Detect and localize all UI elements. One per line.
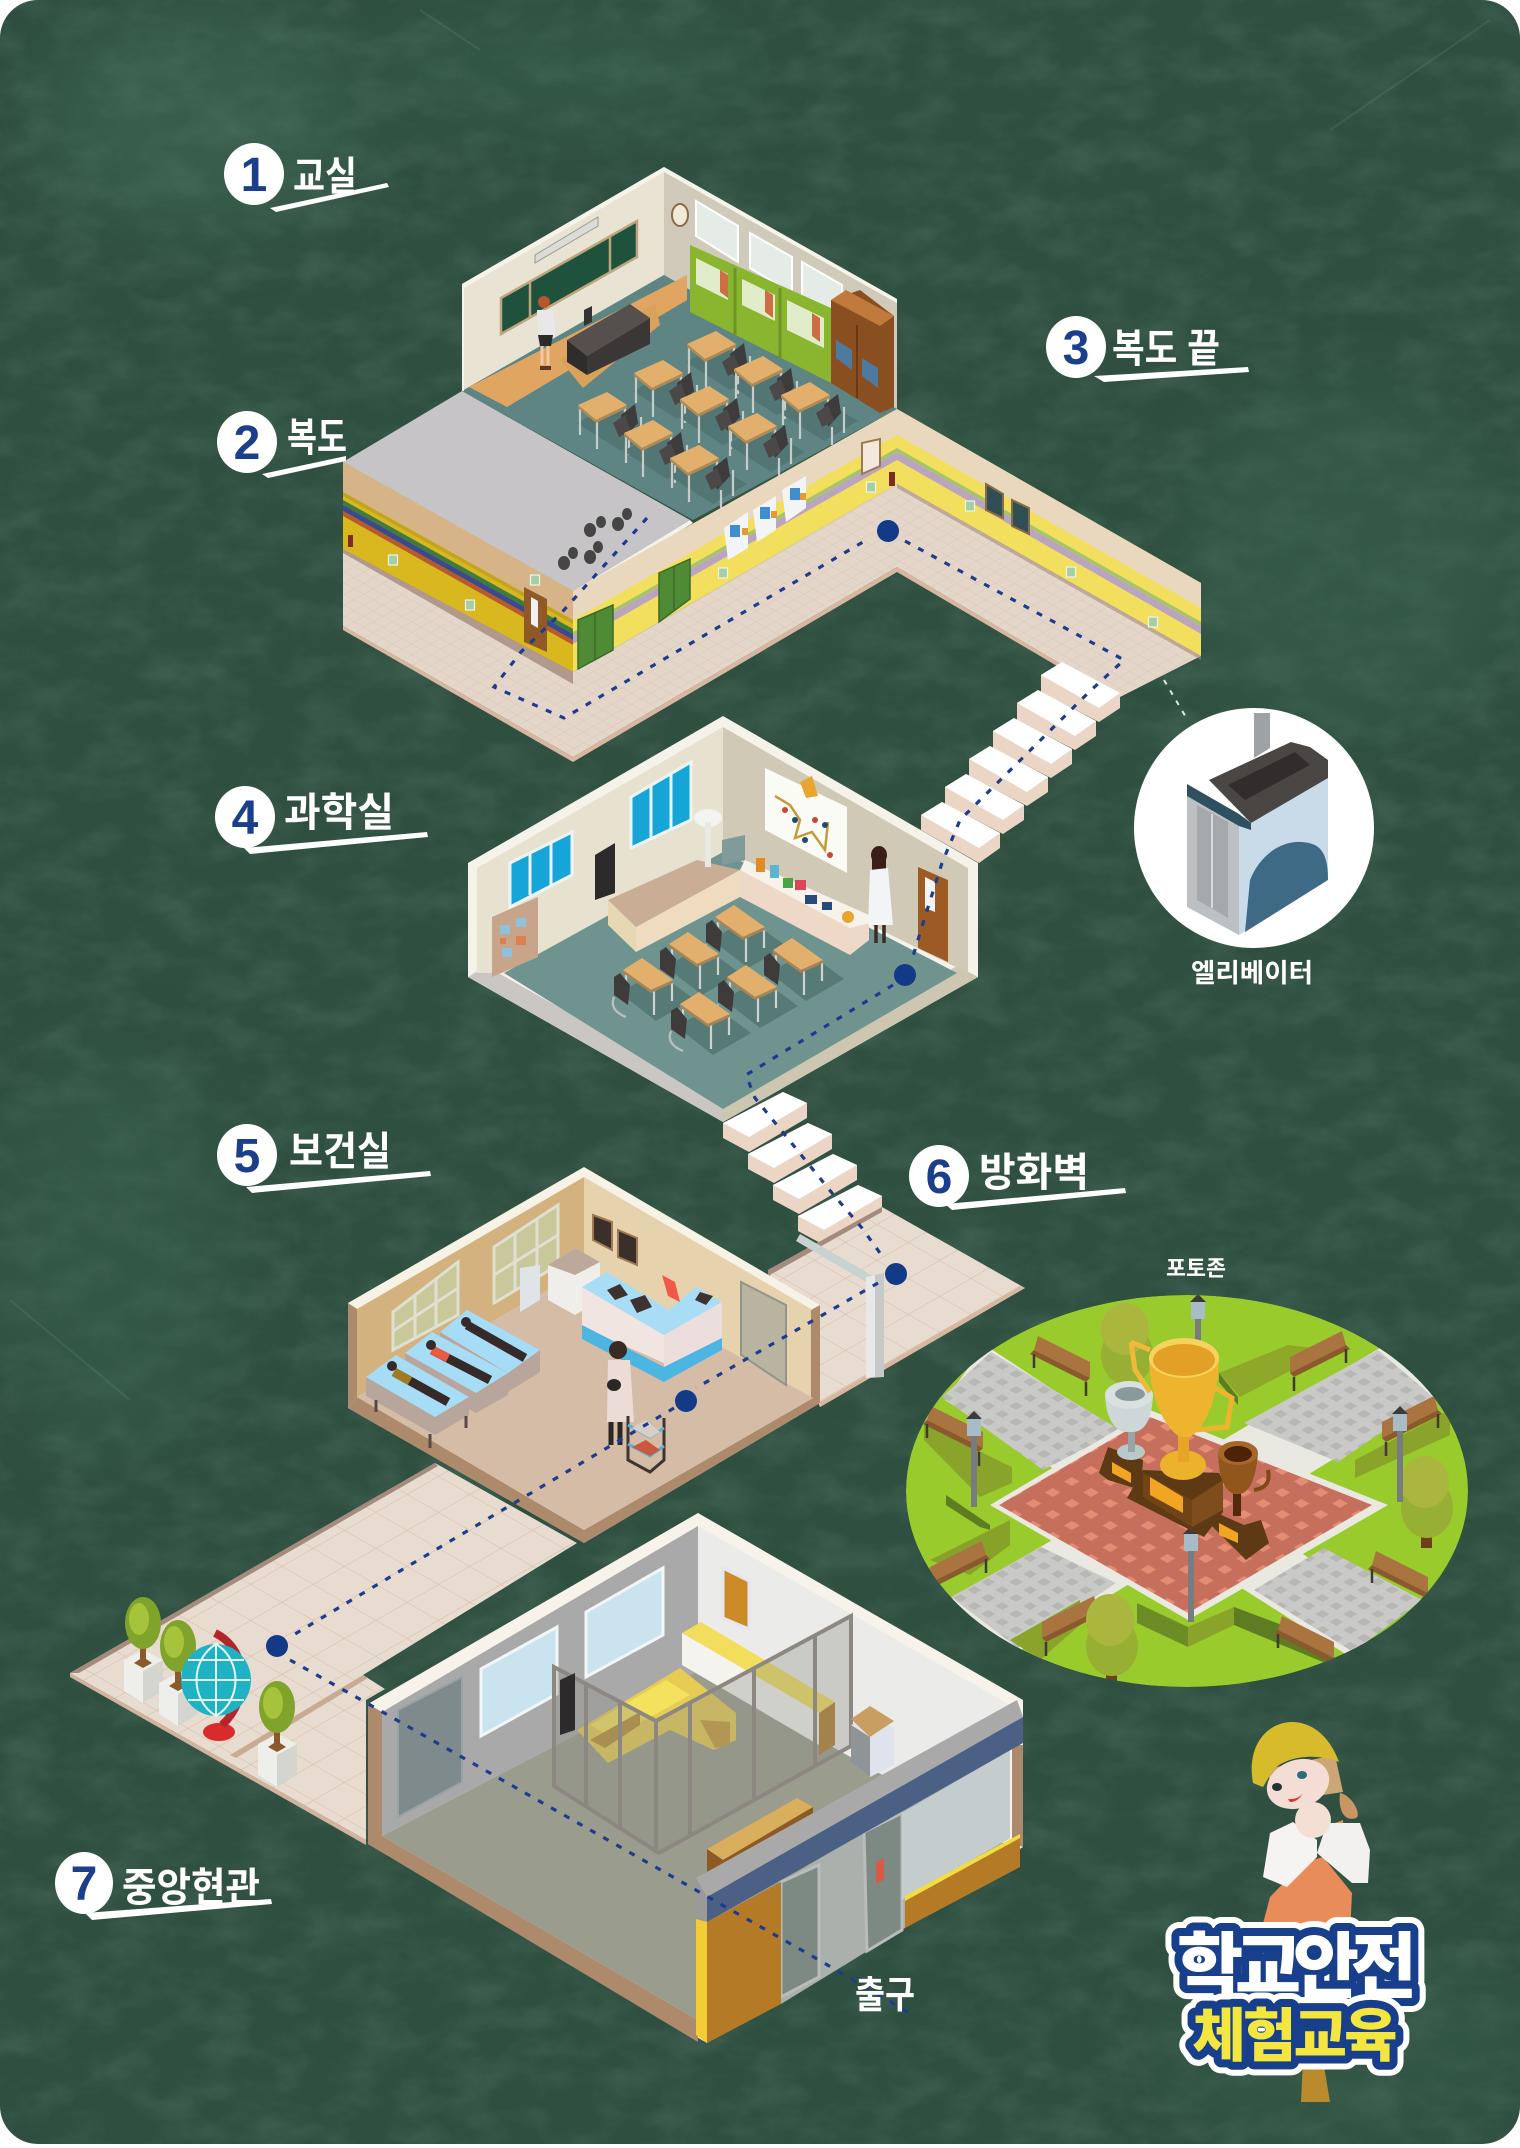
door	[398, 1677, 462, 1817]
label 4: 과학실: 4	[232, 792, 259, 845]
face	[1260, 1751, 1336, 1817]
end corridor wall	[897, 409, 1201, 660]
dashed connector to elevator	[1164, 680, 1187, 719]
route dashes	[266, 518, 1124, 2012]
panel: corridor floor	[343, 484, 1201, 762]
traffic board	[595, 843, 615, 900]
red plaza	[990, 1410, 1388, 1620]
glass door	[741, 1282, 786, 1385]
paved quadrants	[942, 1350, 1433, 1652]
pictures	[593, 1215, 637, 1265]
wall signs	[388, 482, 1158, 627]
science door	[918, 867, 948, 962]
label 1: 교실: 교실	[293, 144, 357, 202]
panel: science room	[468, 716, 978, 1122]
blackboard	[501, 221, 637, 334]
clock	[672, 204, 688, 226]
windows	[393, 1205, 558, 1350]
exit label: 출구	[855, 1975, 915, 2017]
globe	[181, 1633, 251, 1741]
cabinet	[548, 1248, 600, 1315]
label 3: 복도 끝	[1046, 316, 1249, 382]
logo: 학교안전 체험교육: 체험교육	[1192, 2004, 1398, 2069]
label 4: 과학실	[215, 780, 428, 854]
green bookshelves	[690, 245, 831, 383]
dress	[1260, 1857, 1352, 1935]
label 7: 중앙현관: 7	[71, 1858, 97, 1911]
teacher desk	[560, 304, 660, 388]
hair	[1262, 1755, 1358, 1819]
character	[1252, 1722, 1370, 2102]
teacher figure	[537, 296, 556, 370]
silver trophy	[1099, 1381, 1153, 1490]
projector rail	[535, 217, 598, 263]
bookcase	[492, 897, 538, 977]
orange pier	[696, 1882, 781, 2043]
logo: 학교안전 체험교육: 체험교육	[1192, 2004, 1398, 2069]
label 1: 교실	[224, 143, 389, 212]
label 2: 복도: 복도	[287, 405, 347, 463]
orange poster	[723, 1568, 749, 1629]
shell	[348, 1167, 820, 1543]
panel: central hall	[368, 1513, 1023, 2043]
label 6: 방화벽	[909, 1140, 1126, 1210]
label 6: 방화벽: 방화벽	[979, 1140, 1089, 1198]
lockers	[578, 559, 690, 669]
label 3: 복도 끝: 복도 끝	[1112, 316, 1220, 374]
right counter with chemistry items	[740, 858, 869, 955]
lawn	[906, 1295, 1468, 1687]
science poster	[765, 768, 847, 873]
windows	[481, 1568, 663, 1736]
route dots	[266, 520, 916, 1657]
label 2: 복도: 2	[234, 417, 260, 470]
notice board	[862, 439, 880, 474]
panel: health room	[348, 1167, 820, 1543]
label 6: 방화벽: 6	[926, 1151, 952, 1204]
lamps	[966, 1294, 1408, 1622]
wall shelf	[682, 1622, 835, 1755]
sleeves	[1263, 1822, 1317, 1887]
elevator label: 엘리베이터	[1191, 958, 1313, 988]
hedges	[924, 1345, 1450, 1665]
glass partition	[554, 1616, 851, 1853]
logo: 학교안전 체험교육	[1177, 1928, 1417, 2069]
label 5: 보건실: 보건실	[289, 1119, 391, 1177]
left counter	[608, 860, 740, 952]
gate pole	[796, 1234, 884, 1378]
label 5: 보건실: 5	[234, 1130, 260, 1183]
stairs: corridor to science room	[921, 662, 1120, 863]
room shell	[468, 716, 978, 1122]
sofa	[577, 1668, 736, 1763]
label 5: 보건실	[217, 1119, 431, 1193]
logo: 학교안전 체험교육: 학교안전	[1177, 1928, 1417, 2008]
panel: classroom	[343, 167, 897, 596]
logo: 학교안전 체험교육: 학교안전	[1177, 1928, 1417, 2008]
medical cart	[628, 1416, 664, 1472]
label 4: 과학실: 과학실	[284, 780, 394, 838]
windows	[510, 762, 691, 907]
windows	[696, 201, 842, 321]
student desks	[577, 331, 858, 508]
photo zone label: 포토존	[1166, 1256, 1226, 1281]
bronze trophy	[1211, 1441, 1269, 1560]
label 1: 교실: 1	[241, 149, 267, 202]
label 2: 복도	[217, 405, 347, 478]
logo: 학교안전 체험교육: 학교안전	[1177, 1928, 1417, 2008]
label 7: 중앙현관: 중앙현관	[122, 1855, 260, 1913]
panel: corridor walls	[343, 409, 1201, 672]
floor	[357, 1270, 813, 1530]
logo: 학교안전 체험교육: 체험교육	[1192, 2004, 1398, 2069]
low orange wall	[905, 1834, 1020, 1928]
white paths	[945, 1345, 1438, 1660]
hands	[1295, 1802, 1331, 1838]
strap	[1335, 1820, 1345, 1860]
reception desk	[707, 1798, 813, 1885]
plants and globe	[124, 1597, 297, 1787]
science teacher	[868, 846, 893, 943]
panel: firewall tiled area	[768, 1207, 1025, 1407]
walls	[382, 1526, 698, 1836]
panel: photo zone	[906, 1294, 1468, 1687]
label 3: 복도 끝: 3	[1063, 322, 1089, 375]
kiosk	[851, 1706, 894, 1777]
reception counter	[582, 1272, 722, 1382]
helmet	[1252, 1722, 1339, 1787]
lintel	[696, 1700, 1023, 1922]
benches	[923, 1331, 1442, 1676]
walls	[477, 727, 723, 973]
science desks	[613, 905, 844, 1055]
panel: lower tiled path	[70, 1463, 577, 1845]
elevator callout	[1134, 708, 1374, 948]
floor	[504, 852, 957, 1109]
left door	[524, 575, 547, 652]
stairs: science room to firewall	[723, 1092, 882, 1245]
brown cabinets	[831, 290, 894, 413]
shell	[368, 1513, 1023, 2043]
pictures	[986, 484, 1029, 534]
label 7: 중앙현관	[55, 1852, 272, 1920]
entrance glass and doors	[781, 1743, 1023, 2004]
traffic board	[560, 1673, 575, 1735]
elevator body	[1187, 713, 1328, 935]
grey hallway roof	[343, 391, 693, 596]
nurse	[607, 1341, 634, 1445]
floor	[382, 1671, 1010, 2020]
hospital beds	[366, 1310, 540, 1448]
wooden platform	[469, 275, 687, 407]
fire extinguishers	[348, 472, 895, 547]
left corridor wall	[343, 462, 573, 672]
sink and fan	[694, 809, 745, 867]
footprints	[558, 508, 632, 570]
trees	[1086, 1303, 1453, 1686]
classroom walls	[462, 167, 897, 409]
classroom floor	[462, 275, 897, 520]
walls	[357, 1177, 584, 1397]
boot	[1301, 2060, 1330, 2102]
student artwork	[724, 476, 806, 560]
screen	[520, 1265, 540, 1312]
front corridor wall	[573, 409, 897, 672]
gold trophy	[1127, 1338, 1232, 1537]
